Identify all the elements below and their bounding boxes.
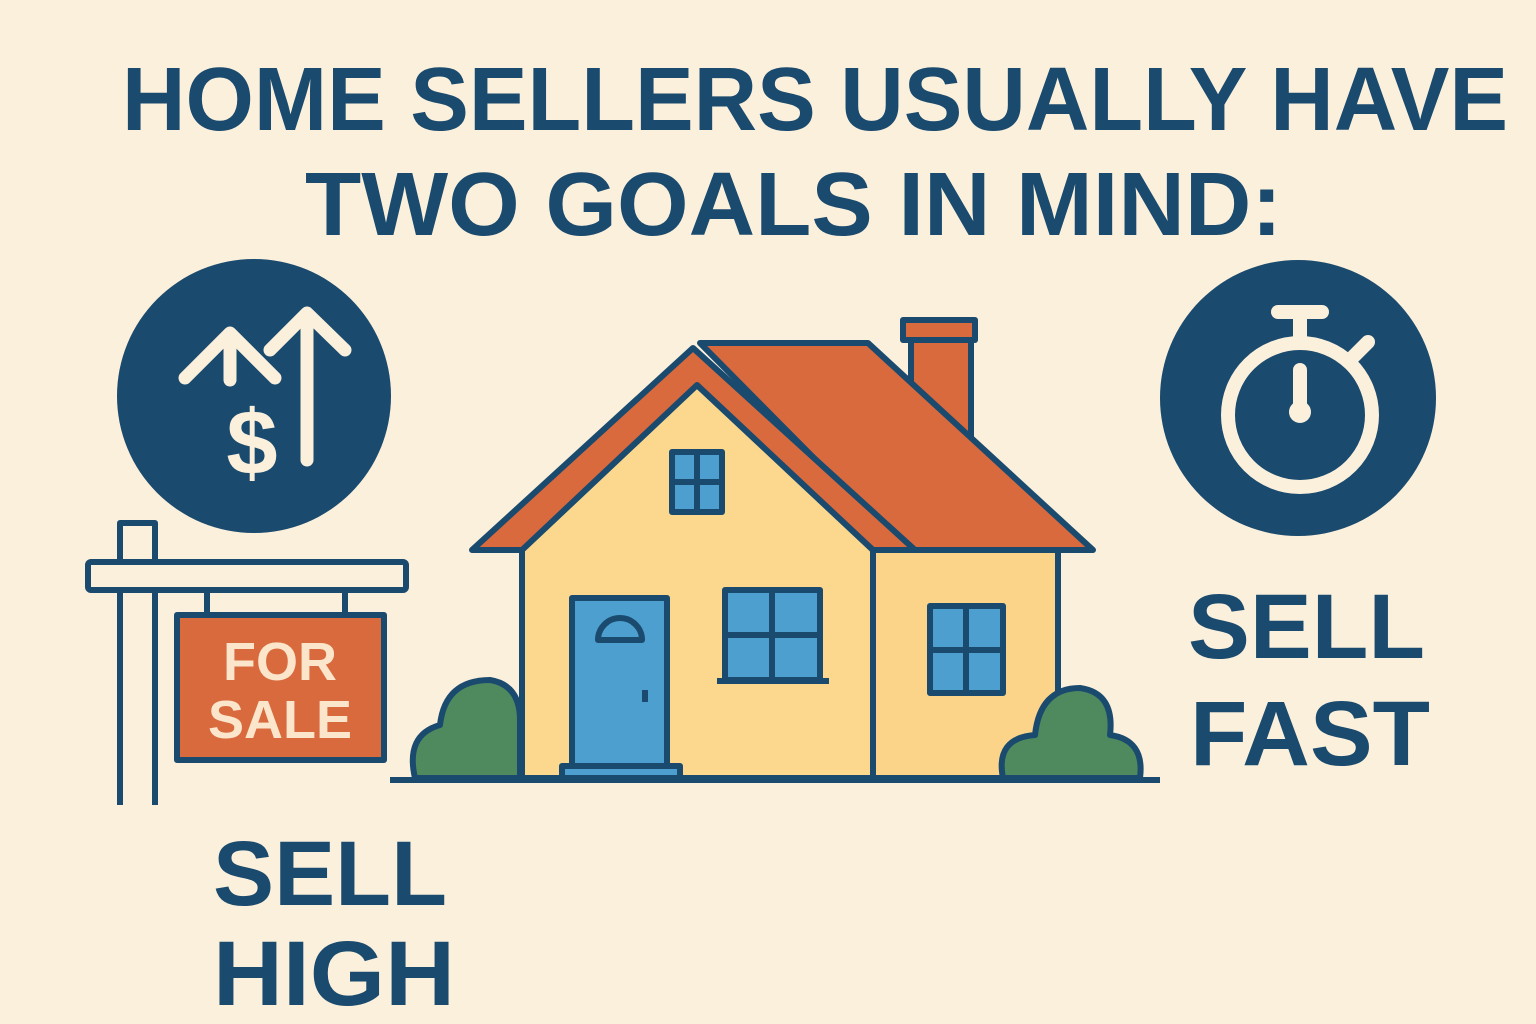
for sale sign: FOR	[223, 632, 337, 692]
for sale sign: SALE	[208, 690, 352, 750]
title: HOME SELLERS USUALLY HAVE	[122, 50, 1508, 150]
icon: price up circle: $	[226, 392, 278, 494]
label: sell fast: SELL	[1188, 576, 1425, 678]
icon: stopwatch circle	[1160, 260, 1436, 536]
label: sell high: HIGH	[213, 923, 455, 1024]
title	[122, 50, 1508, 255]
label: sell high: SELL	[213, 823, 447, 925]
label: sell high	[213, 823, 455, 1024]
house	[390, 320, 1160, 780]
label: sell fast	[1188, 576, 1430, 785]
for sale sign	[88, 523, 406, 805]
title: TWO GOALS IN MIND:	[305, 155, 1282, 255]
label: sell fast: FAST	[1190, 683, 1430, 785]
icon: price up circle	[117, 259, 391, 533]
